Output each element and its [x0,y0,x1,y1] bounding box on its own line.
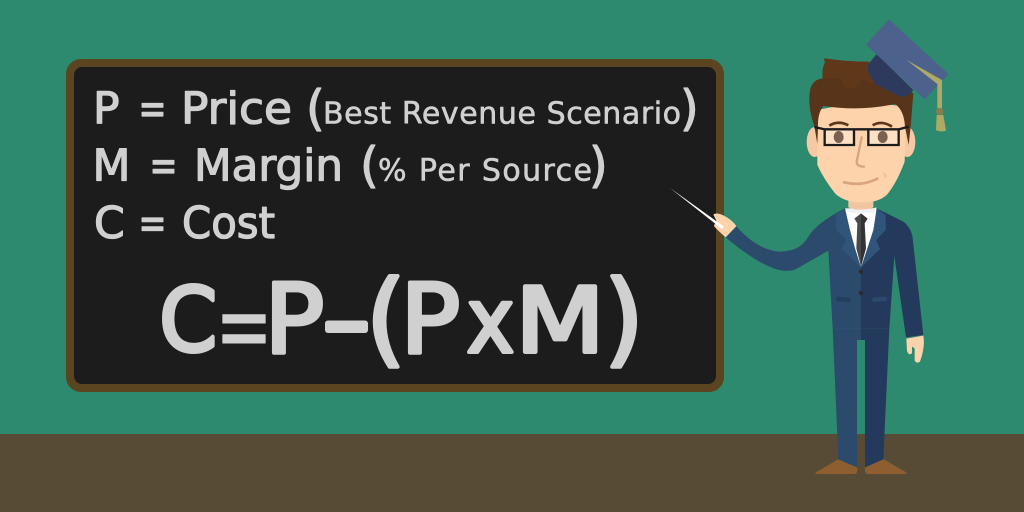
teacher figure [670,19,948,474]
shirt [845,208,877,267]
head and cap [807,19,948,202]
text block: price definition: ( [306,80,325,136]
formula [159,260,644,384]
cap board [866,19,948,99]
text block: price definition [93,80,699,136]
nose [857,137,864,167]
neck [848,201,873,212]
ears [807,127,823,157]
panel: chalkboard [66,59,724,392]
text block: cost definition: Cost [182,198,275,249]
text block: price definition: Best Revenue Scenario [323,96,681,132]
eyes [834,131,844,143]
formula: ( [366,260,406,378]
text block: margin definition: Margin [194,140,343,192]
resting hand [906,336,924,363]
floor [0,434,1024,512]
buttons [859,269,863,274]
glasses [814,127,909,145]
lens tint [825,130,854,145]
text block: price definition: P [93,84,120,134]
tie [854,213,868,267]
mouth [844,179,877,184]
text block: price definition: Price [181,84,292,134]
text block: margin definition: M [92,140,130,192]
text block: cost definition: C [94,198,125,249]
cap base [868,54,913,97]
text block: margin definition [92,138,608,194]
text block: margin definition: % Per Source [378,154,592,188]
left shoe [815,459,857,474]
face [817,104,906,202]
right shoe [865,459,907,474]
text block: margin definition: ) [589,138,608,194]
hair quiff [822,58,887,88]
pointer stick [670,188,724,229]
pointing hand [713,213,736,237]
pockets [836,297,851,302]
formula: ) [604,260,644,378]
jacket right with arm [861,208,923,337]
text block: cost definition [94,198,275,249]
body and pointer [670,188,924,474]
text block: price definition: = [138,84,166,134]
hair [809,58,913,145]
text block: margin definition: ( [360,138,379,194]
formula: C [159,269,217,372]
text block: margin definition: = [150,140,178,192]
formula: P [264,264,324,376]
lapels [836,208,861,267]
jacket left with arm [726,208,861,328]
formula: x [466,269,514,374]
tassel [907,60,946,132]
text block: cost definition: = [138,198,166,249]
formula: = [216,267,272,384]
formula: P [400,264,460,376]
trousers [833,328,861,467]
formula: M [515,269,605,374]
text block: price definition: ) [680,80,699,136]
eyebrows [829,123,848,126]
dimple [884,174,886,177]
formula: – [324,267,370,374]
